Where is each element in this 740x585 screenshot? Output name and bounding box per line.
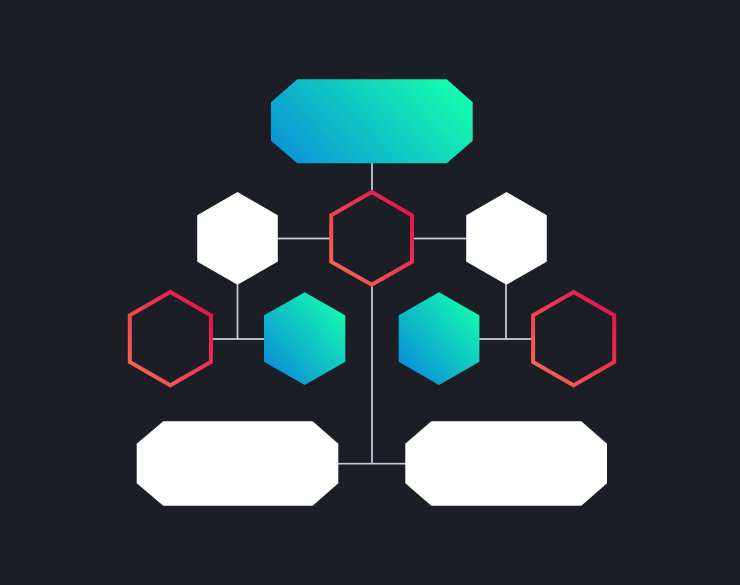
right outlined hexagon xyxy=(533,292,614,385)
center outlined hexagon xyxy=(331,192,412,285)
bottom left white octagon xyxy=(137,421,338,506)
left white hexagon xyxy=(197,192,278,285)
right white hexagon xyxy=(466,192,547,285)
connector lines xyxy=(211,163,533,464)
left outlined hexagon xyxy=(130,292,211,385)
left gradient hexagon xyxy=(264,292,345,385)
right gradient hexagon xyxy=(399,292,479,385)
top gradient octagon xyxy=(271,79,473,163)
bottom right white octagon xyxy=(405,421,607,506)
